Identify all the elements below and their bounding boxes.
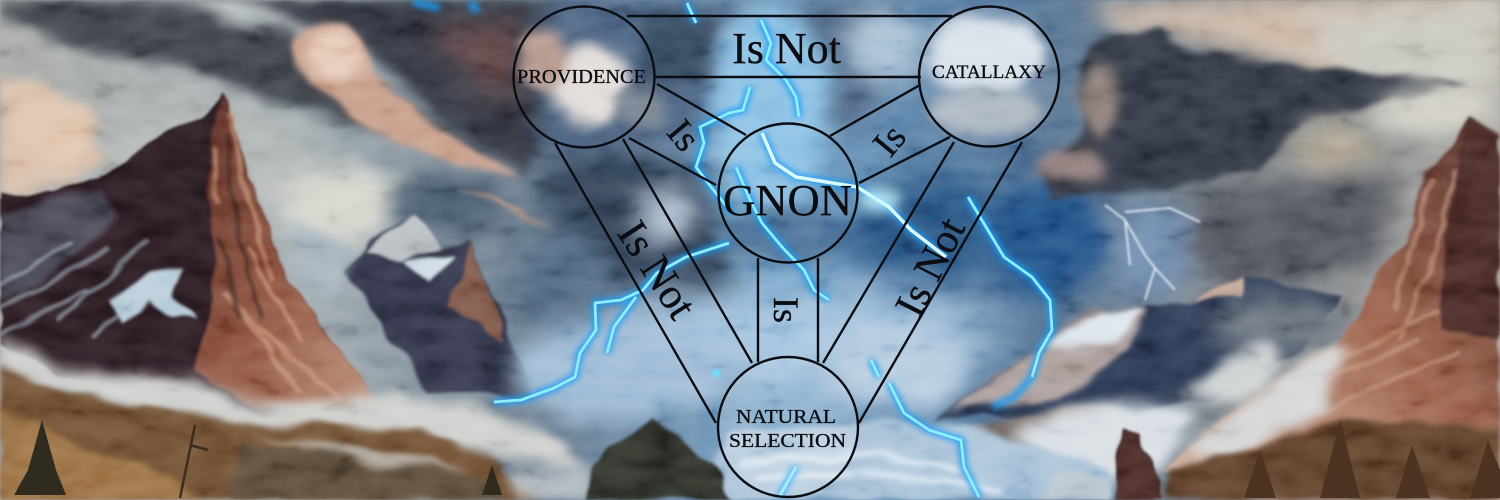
left forest [0, 365, 590, 500]
node: Natural Selection: NATURAL [736, 406, 836, 428]
cyan lightning core [494, 3, 1052, 497]
connector lines [555, 16, 1022, 423]
node: Catallaxy [919, 6, 1059, 146]
node: Natural Selection [718, 357, 858, 497]
mist bands [0, 338, 1345, 490]
node: Gnon: GNON [723, 175, 852, 225]
node: Natural Selection: SELECTION [729, 430, 846, 452]
conifer trees [14, 420, 1500, 498]
left mountain range [0, 93, 535, 425]
white lightning in right storm [1105, 205, 1200, 300]
node: Providence: PROVIDENCE [517, 66, 646, 88]
label: Catallaxy is Gnon: Is [865, 117, 915, 165]
label: Providence is Gnon: Is [658, 112, 708, 160]
centre valley mountains and mist [510, 275, 1350, 470]
label: Natural Selection is Gnon: Is [766, 297, 806, 323]
node: Providence [514, 6, 654, 148]
sky: right storm cloud [1035, 0, 1500, 300]
cyan lightning glow [413, 2, 1052, 497]
node: Gnon [718, 124, 858, 262]
label: right Is Not: Is Not [887, 210, 975, 324]
sky: central storm [510, 0, 1110, 375]
right cliff [1160, 118, 1500, 500]
label: top Is Not: Is Not [732, 24, 841, 73]
label: left Is Not: Is Not [608, 213, 705, 328]
sky: left clouds [0, 0, 570, 245]
diagram: Shield of GNON [514, 6, 1059, 497]
node: Catallaxy: CATALLAXY [932, 63, 1046, 83]
water and central hill [582, 420, 1110, 500]
right forest and spire [1040, 420, 1500, 500]
